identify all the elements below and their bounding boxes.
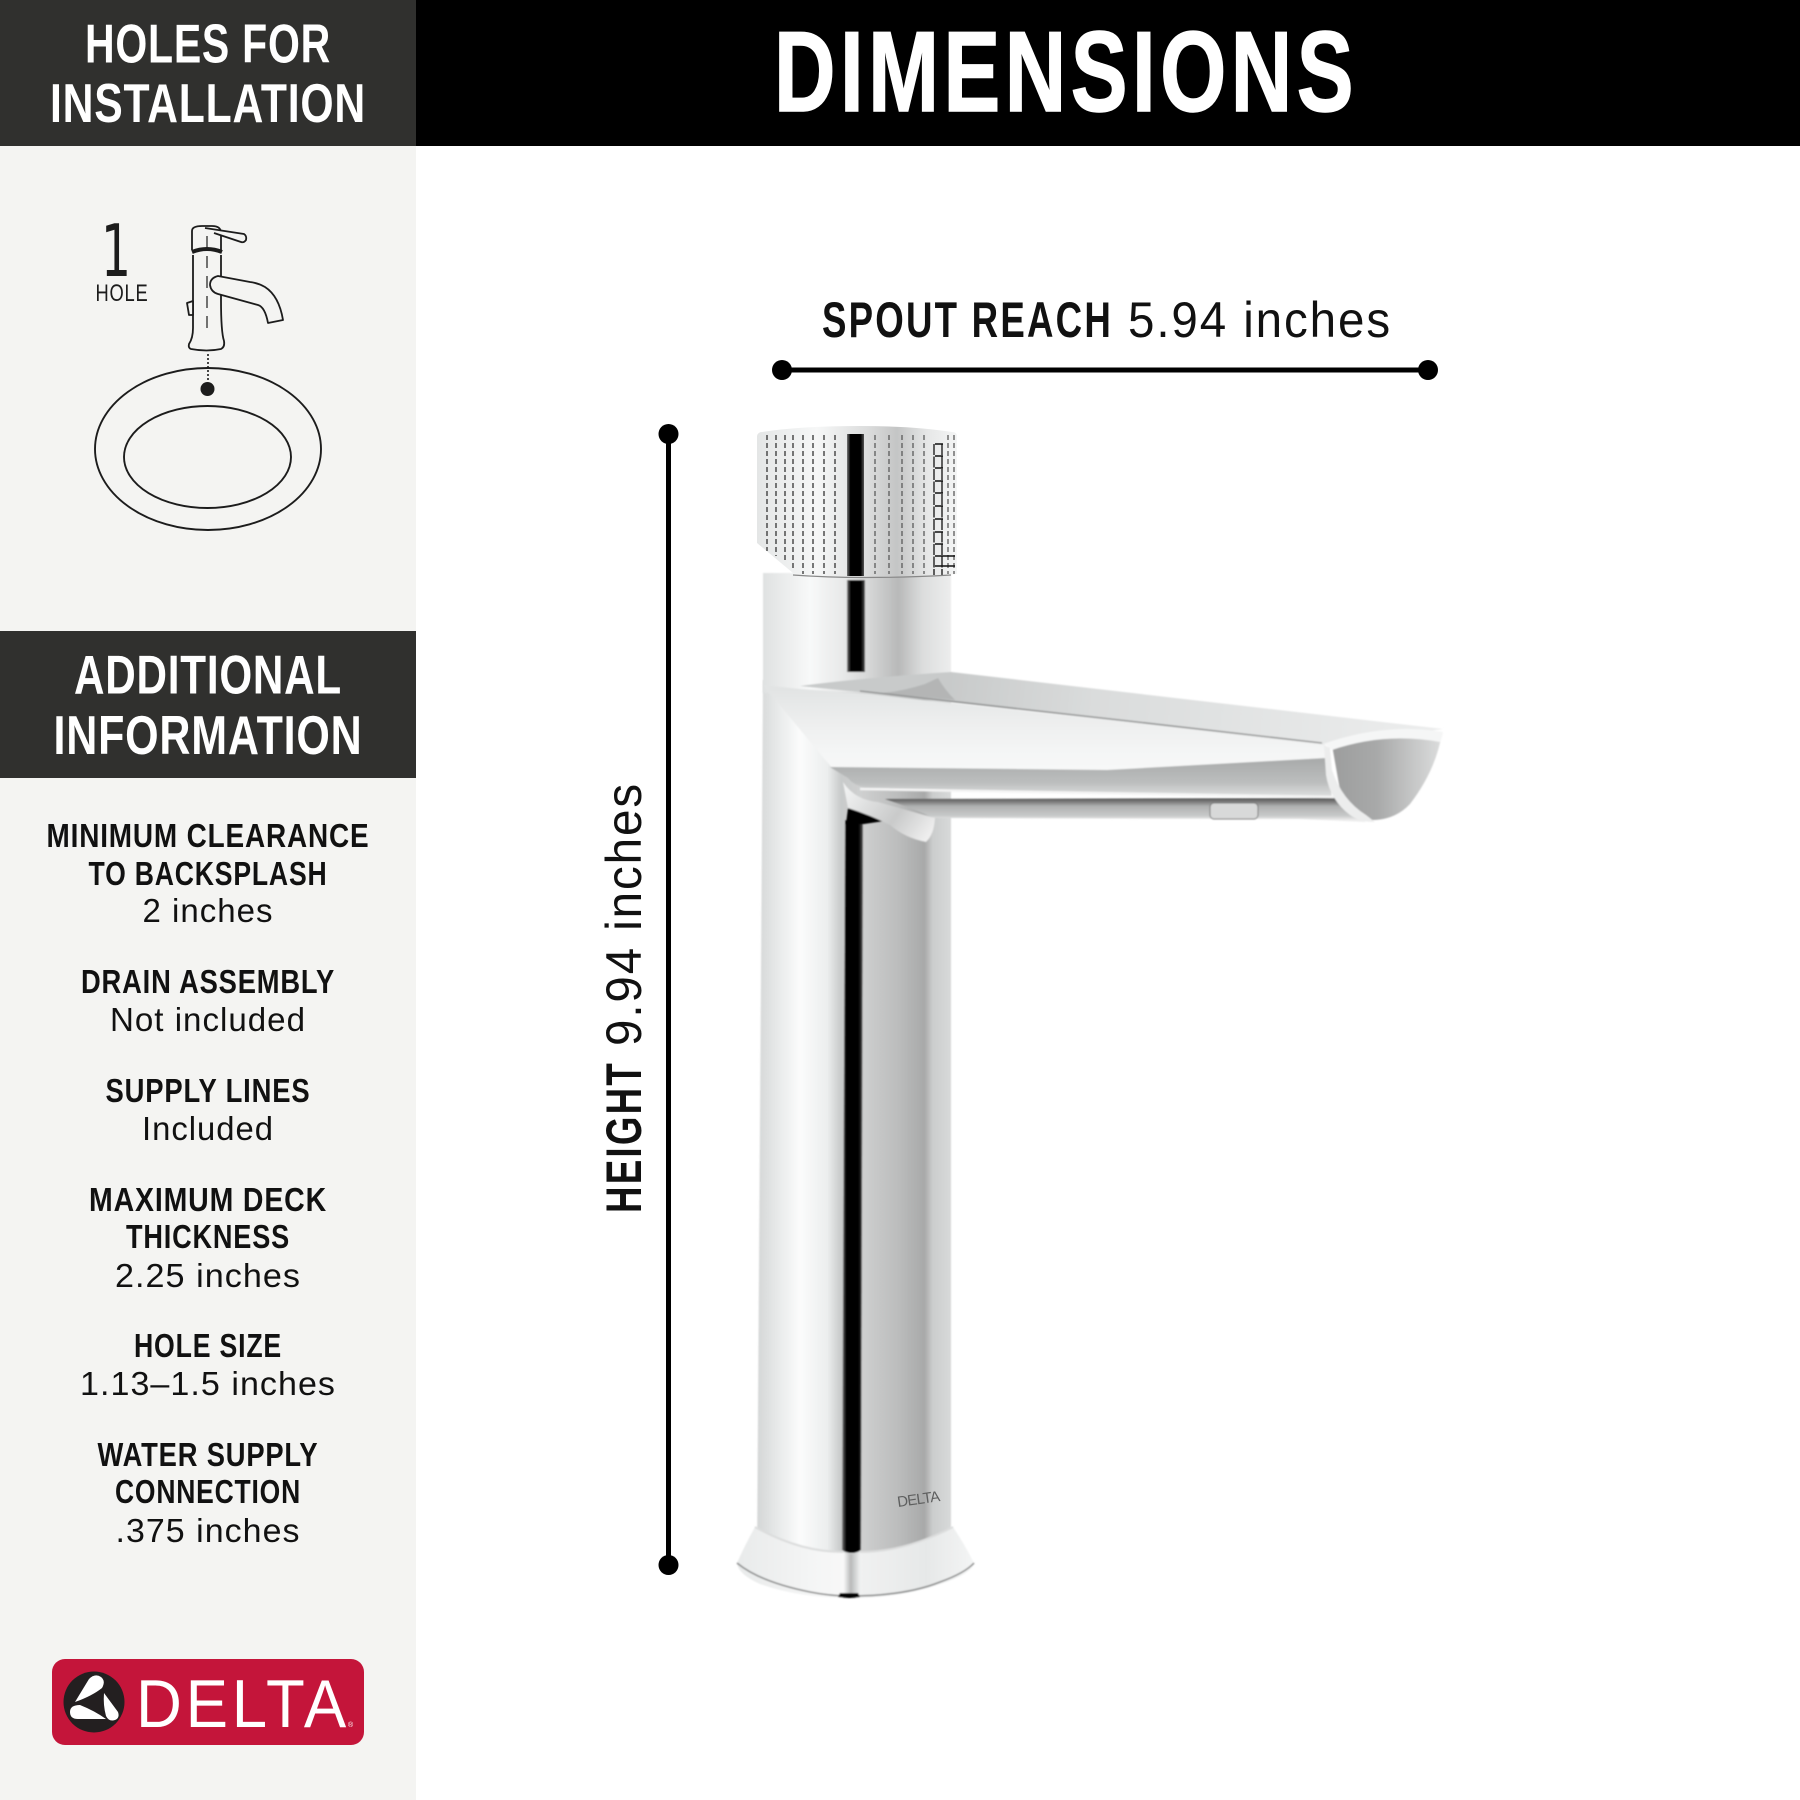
title: dimensions: DIMENSIONS <box>774 9 1358 136</box>
spec: maximum deck thickness: 2.25 inches <box>115 1257 301 1294</box>
icon: small faucet <box>187 226 283 350</box>
product: faucet <box>737 426 1443 1598</box>
height dimension <box>596 424 678 1575</box>
arrow: height line <box>658 424 678 1575</box>
spout reach dimension <box>772 292 1438 380</box>
faucet base <box>737 1527 974 1598</box>
label: spout reach: SPOUT REACH <box>822 292 1113 348</box>
engraved brand: DELTA <box>896 1488 942 1511</box>
heading bar: dimensions <box>416 0 1800 146</box>
spec: minimum clearance: 2 inches <box>142 892 274 929</box>
spec: drain assembly: Not included <box>110 1001 306 1038</box>
heading text: holes for installation: INSTALLATION <box>50 72 366 134</box>
spec: drain assembly: DRAIN ASSEMBLY <box>81 963 335 1000</box>
spec: hole size: HOLE SIZE <box>134 1327 282 1364</box>
spec: maximum deck thickness: MAXIMUM DECK <box>89 1181 327 1218</box>
label: spout reach: 5.94 inches <box>1128 292 1392 348</box>
spout dark wedge <box>846 808 891 824</box>
spout upper plane <box>800 672 1443 745</box>
spec: minimum clearance: TO BACKSPLASH <box>88 855 328 892</box>
heading text: additional information: ADDITIONAL <box>74 644 342 706</box>
spec: maximum deck thickness: THICKNESS <box>126 1218 290 1255</box>
panel: sidebar <box>0 0 416 1800</box>
logo wordmark: DELTA <box>136 1666 350 1742</box>
icon: one hole faucet and sink diagram <box>95 209 321 530</box>
heading text: additional information: INFORMATION <box>54 704 362 766</box>
spec: hole size: 1.13–1.5 inches <box>80 1365 336 1402</box>
registered mark: ® <box>348 1721 354 1729</box>
faucet neck <box>763 573 951 693</box>
text: 1 hole: HOLE <box>96 280 148 307</box>
faucet spout <box>763 672 1443 842</box>
label: height: HEIGHT <box>596 1061 652 1213</box>
arrow: spout reach line <box>772 360 1438 380</box>
logo: delta <box>52 1659 364 1745</box>
spout lower bar <box>885 798 1366 822</box>
heading text: holes for installation: HOLES FOR <box>85 12 331 74</box>
spec: minimum clearance: MINIMUM CLEARANCE <box>46 817 370 854</box>
spec list <box>46 817 370 1549</box>
spout collar <box>843 782 935 842</box>
heading bar: holes for installation <box>0 0 416 146</box>
heading bar: additional information <box>0 631 416 778</box>
spout shaded band <box>830 758 1332 798</box>
spec: water supply connection: .375 inches <box>116 1512 300 1549</box>
faucet body <box>757 680 951 1560</box>
icon: sink <box>95 354 321 530</box>
spec: water supply connection: WATER SUPPLY <box>98 1436 318 1473</box>
spout outlet <box>1332 732 1442 820</box>
text: 1 hole: 1 <box>101 209 131 293</box>
spec: supply lines: SUPPLY LINES <box>106 1072 310 1109</box>
spec: water supply connection: CONNECTION <box>115 1473 301 1510</box>
label: height: 9.94 inches <box>596 782 652 1046</box>
spec: supply lines: Included <box>142 1110 274 1147</box>
spout face <box>763 685 1326 770</box>
faucet knob <box>757 426 957 578</box>
icon: delta mark <box>64 1672 124 1732</box>
